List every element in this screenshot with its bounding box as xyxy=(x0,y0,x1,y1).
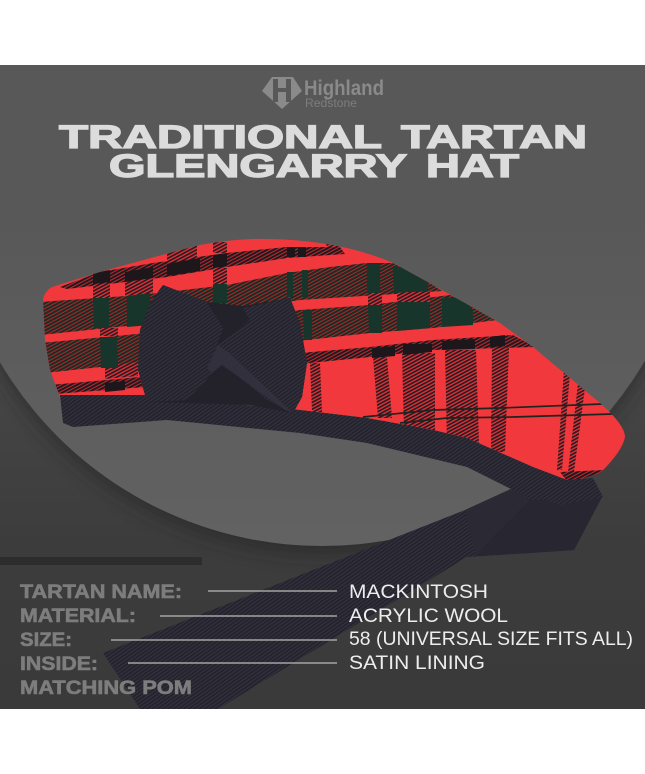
right dark stripe xyxy=(300,335,535,364)
label: matching pom: MATCHING POM xyxy=(20,678,192,699)
logo icon xyxy=(262,77,302,109)
label: size: SIZE: xyxy=(20,630,72,651)
title word: hat: HAT xyxy=(426,148,520,184)
thin check lines xyxy=(363,404,612,423)
middle hatched band xyxy=(40,295,497,373)
logo xyxy=(262,77,384,110)
ribbon knot folds xyxy=(465,488,530,556)
tartan crown xyxy=(43,238,625,480)
background disc xyxy=(0,65,645,553)
label: inside: INSIDE: xyxy=(20,654,98,675)
vertical hatched stripes xyxy=(93,240,585,472)
title xyxy=(59,119,587,184)
black checks xyxy=(93,247,505,392)
leader lines xyxy=(111,591,337,663)
bow right lobe xyxy=(218,298,307,413)
logo wordmark: Highland xyxy=(304,77,384,100)
ribbon bow xyxy=(138,285,307,413)
title word: glengarry: GLENGARRY xyxy=(109,148,407,184)
bow cross strip xyxy=(207,345,293,413)
lower right hatched hem xyxy=(560,470,603,480)
lower left dark stripe xyxy=(50,377,145,394)
bow left lobe xyxy=(138,285,227,402)
hat xyxy=(30,230,640,505)
top dark stripe xyxy=(60,247,345,289)
specification labels xyxy=(20,582,192,699)
green checks xyxy=(93,263,473,368)
hat band xyxy=(60,395,603,505)
label: material: MATERIAL: xyxy=(20,606,136,627)
value: satin lining: SATIN LINING xyxy=(349,652,485,674)
upper hatched band xyxy=(40,263,442,335)
divider bar xyxy=(0,557,202,565)
value: acrylic wool: ACRYLIC WOOL xyxy=(349,605,508,627)
bow base xyxy=(138,285,307,413)
label: tartan name: TARTAN NAME: xyxy=(20,582,182,603)
value: mackintosh: MACKINTOSH xyxy=(349,581,488,603)
title word: tartan: TARTAN xyxy=(401,119,587,155)
logo sub-brand: Redstone xyxy=(305,96,357,110)
hat tail ribbon xyxy=(103,488,602,709)
value: size: 58 (UNIVERSAL SIZE FITS ALL) xyxy=(349,628,633,650)
title word: traditional: TRADITIONAL xyxy=(59,119,382,155)
specification values xyxy=(349,581,633,674)
